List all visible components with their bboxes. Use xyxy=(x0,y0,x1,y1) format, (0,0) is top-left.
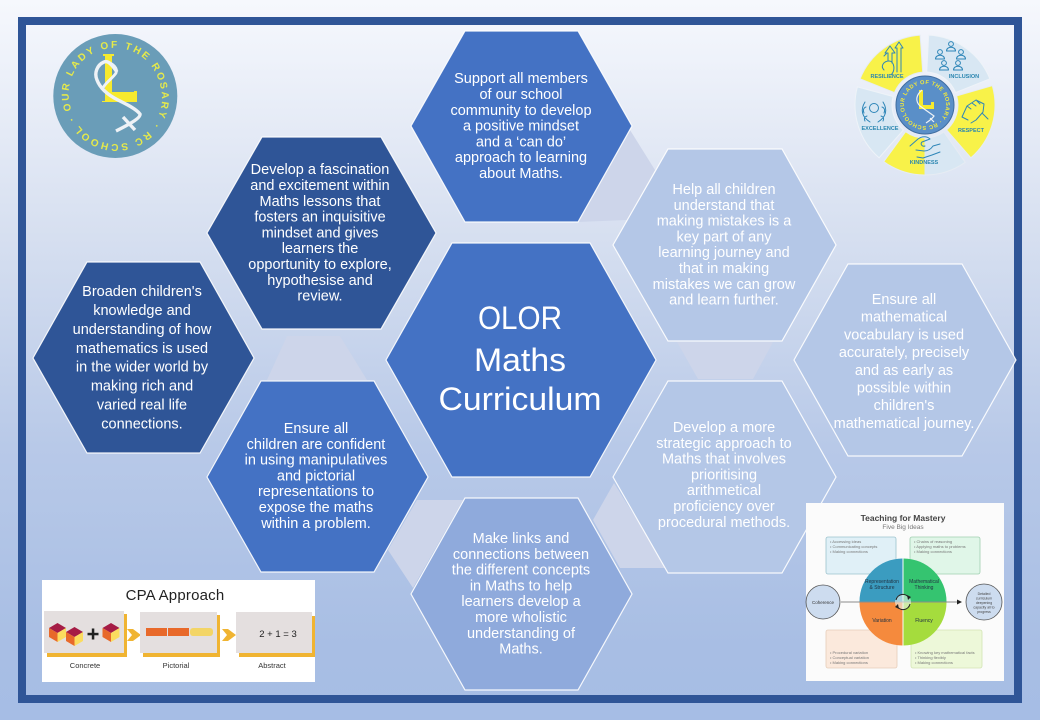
panel: manipulatives and representations: children are confident xyxy=(247,437,385,453)
step: concrete: Concrete xyxy=(70,661,100,670)
panel: making mistakes: making mistakes is a xyxy=(657,214,792,230)
box: mathematical thinking notes: • Chains of reasoning xyxy=(914,539,952,544)
panel: broaden knowledge: connections. xyxy=(101,416,183,432)
connector shapes between hexagons xyxy=(267,130,773,588)
panel: fascination and excitement: opportunity to explore, xyxy=(248,257,392,273)
panel: positive mindset: about Maths. xyxy=(479,166,563,182)
panel: making mistakes: Help all children xyxy=(672,182,776,198)
box: representation notes: • Making connections xyxy=(830,549,868,554)
panel: strategic approach: procedural methods. xyxy=(658,515,790,531)
segment: kindness: KINDNESS xyxy=(910,160,939,166)
panel: broaden knowledge: mathematics is used xyxy=(76,341,208,357)
panel: broaden knowledge: knowledge and xyxy=(93,303,191,319)
circle: coherence xyxy=(806,585,840,619)
box: fluency notes: • Knowing key mathematical facts xyxy=(915,650,975,655)
panel: making mistakes xyxy=(613,149,836,341)
panel: manipulatives and representations: expose the maths xyxy=(259,500,373,516)
step: concrete xyxy=(44,611,127,670)
segment: inclusion xyxy=(927,35,990,93)
step: abstract xyxy=(236,612,315,670)
panel: fascination and excitement: and excitement within xyxy=(250,178,390,194)
circle: mastery outcome: deepening xyxy=(976,601,992,605)
box: variation notes xyxy=(826,630,897,668)
panel: positive mindset: Support all members xyxy=(454,71,588,87)
panel: links and connections: connections between xyxy=(453,547,589,563)
panel: making mistakes: and learn further. xyxy=(669,293,779,309)
circle: mastery outcome xyxy=(966,584,1002,620)
box: representation notes xyxy=(826,537,896,574)
panel: mathematical vocabulary: possible within xyxy=(857,380,951,396)
panel: manipulatives and representations: in using manipulatives xyxy=(245,453,387,469)
panel: broaden knowledge: varied real life xyxy=(97,398,187,414)
circle: coherence: Coherence xyxy=(812,600,835,605)
panel: making mistakes: that in making xyxy=(679,261,769,277)
box: fluency notes: • Thinking flexibly xyxy=(915,655,946,660)
panel: fascination and excitement: fosters an inquisitive xyxy=(254,210,386,226)
panel: manipulatives and representations: Ensure all xyxy=(284,421,348,437)
heading: CPA Approach: CPA Approach xyxy=(126,587,224,604)
panel: central title: OLOR xyxy=(478,300,562,336)
panel: making mistakes: key part of any xyxy=(676,229,772,245)
panel: mathematical vocabulary: accurately, precisely xyxy=(839,345,970,361)
heading: Teaching for Mastery: Five Big Ideas xyxy=(882,524,924,531)
panel: central title: Maths xyxy=(474,342,566,378)
segment: respect xyxy=(947,86,995,158)
panel: broaden knowledge: in the wider world by xyxy=(76,360,209,376)
chart: five big ideas circle: Thinking xyxy=(915,585,934,591)
segment: respect: RESPECT xyxy=(958,128,985,134)
panel: mathematical vocabulary: mathematical xyxy=(861,310,947,326)
image: CPA approach diagram xyxy=(42,580,315,682)
box: mathematical thinking notes: • Making connections xyxy=(914,549,952,554)
panel: strategic approach: prioritising xyxy=(691,467,757,483)
box: variation notes: • Conceptual variation xyxy=(830,655,869,660)
panel: links and connections: Make links and xyxy=(473,531,569,547)
chart: five big ideas circle: Representation xyxy=(865,579,899,585)
panel: positive mindset xyxy=(411,31,632,222)
panel: mathematical vocabulary xyxy=(794,264,1016,456)
logo: Our Lady of the Rosary school badge: OUR LADY OF THE ROSARY · RC SCHOOL · xyxy=(62,41,169,151)
panel: links and connections: understanding of xyxy=(467,626,576,642)
panel: manipulatives and representations xyxy=(207,381,428,572)
panel: strategic approach: Maths that involves xyxy=(662,452,786,468)
chart: five big ideas circle: Fluency xyxy=(915,618,933,624)
panel: strategic approach: strategic approach to xyxy=(656,436,792,452)
box: mathematical thinking notes: • Applying maths to problems xyxy=(914,544,966,549)
segment: kindness xyxy=(884,132,965,175)
panel: fascination and excitement: hypothesise and xyxy=(267,273,373,289)
step: abstract: Abstract xyxy=(258,661,287,670)
panel: making mistakes: learning journey and xyxy=(658,245,790,261)
box: fluency notes xyxy=(911,630,982,668)
panel: positive mindset: a positive mindset xyxy=(463,119,579,135)
step: pictorial xyxy=(140,612,220,670)
box: representation notes: • Accessing ideas xyxy=(830,539,861,544)
panel: broaden knowledge xyxy=(33,262,254,453)
step: abstract: 2 + 1 = 3 xyxy=(259,629,297,640)
panel: links and connections: in Maths to help xyxy=(470,578,572,594)
panel: links and connections: the different concepts xyxy=(452,563,590,579)
box: variation notes: • Making connections xyxy=(830,660,868,665)
panel: positive mindset: community to develop xyxy=(450,103,592,119)
panel: links and connections: more wholistic xyxy=(475,610,567,626)
circle: mastery outcome: progress xyxy=(977,610,991,614)
segment: resilience xyxy=(860,35,923,93)
heading: Teaching for Mastery: Teaching for Mastery xyxy=(861,513,946,523)
arrow: concrete to pictorial xyxy=(127,629,141,641)
box: mathematical thinking notes xyxy=(910,537,980,574)
panel: fascination and excitement: Develop a fascination xyxy=(251,162,389,178)
step: pictorial: Pictorial xyxy=(163,661,190,670)
arrow: pictorial to abstract xyxy=(222,629,236,641)
panel: strategic approach: arithmetical xyxy=(687,483,761,499)
panel: links and connections xyxy=(411,498,632,690)
logo: school values wheel xyxy=(856,35,995,174)
chart: five big ideas circle: Mathematical xyxy=(909,579,939,585)
panel: strategic approach: Develop a more xyxy=(673,420,775,436)
panel: positive mindset: approach to learning xyxy=(455,150,587,166)
panel: fascination and excitement: learners the xyxy=(282,241,358,257)
segment: inclusion: INCLUSION xyxy=(949,74,979,80)
panel: central title: Curriculum xyxy=(438,381,602,417)
segment: excellence: EXCELLENCE xyxy=(862,126,899,132)
panel: making mistakes: understand that xyxy=(674,198,774,214)
panel: positive mindset: of our school xyxy=(479,87,563,103)
panel: links and connections: learners develop a xyxy=(461,594,582,610)
panel: manipulatives and representations: representations to xyxy=(258,484,374,500)
panel: making mistakes: mistakes we can grow xyxy=(653,277,796,293)
panel: mathematical vocabulary: Ensure all xyxy=(872,292,936,308)
segment: resilience: RESILIENCE xyxy=(870,74,904,80)
box: variation notes: • Procedural variation xyxy=(830,650,868,655)
panel: fascination and excitement: review. xyxy=(297,289,343,305)
panel: broaden knowledge: understanding of how xyxy=(73,322,212,338)
panel: mathematical vocabulary: vocabulary is used xyxy=(844,327,964,343)
panel: broaden knowledge: making rich and xyxy=(91,378,193,394)
panel: central title xyxy=(386,243,656,477)
chart: five big ideas circle: Variation xyxy=(872,618,892,624)
circle: mastery outcome: curriculum xyxy=(976,596,992,600)
panel: links and connections: Maths. xyxy=(499,642,543,658)
panel: fascination and excitement xyxy=(207,137,436,329)
chart: five big ideas circle xyxy=(860,558,946,646)
box: fluency notes: • Making connections xyxy=(915,660,953,665)
wheel centre badge xyxy=(896,76,954,134)
image: Teaching for Mastery diagram xyxy=(806,503,1004,681)
circle: mastery outcome: capacity all to xyxy=(973,606,995,610)
panel: mathematical vocabulary: mathematical journey. xyxy=(834,416,974,432)
panel: strategic approach xyxy=(613,381,836,573)
panel: positive mindset: and a ‘can do’ xyxy=(476,134,566,150)
panel: fascination and excitement: Maths lessons that xyxy=(260,194,380,210)
circle: mastery outcome: Detailed xyxy=(978,592,990,596)
arrow: coherence to mastery xyxy=(841,600,962,604)
chart: five big ideas circle: & Structure xyxy=(869,585,895,591)
icon: cycle arrows xyxy=(895,594,911,610)
panel: broaden knowledge: Broaden children's xyxy=(82,284,202,300)
heading: Teaching for Mastery xyxy=(861,513,946,531)
panel: fascination and excitement: mindset and gives xyxy=(262,225,378,241)
panel: mathematical vocabulary: and as early as xyxy=(855,363,953,379)
box: representation notes: • Communicating concepts xyxy=(830,544,877,549)
panel: strategic approach: proficiency over xyxy=(673,499,775,515)
segment: excellence xyxy=(855,87,903,158)
panel: mathematical vocabulary: children's xyxy=(874,398,934,414)
panel: manipulatives and representations: within a problem. xyxy=(260,516,371,532)
panel: manipulatives and representations: and pictorial xyxy=(277,468,355,484)
